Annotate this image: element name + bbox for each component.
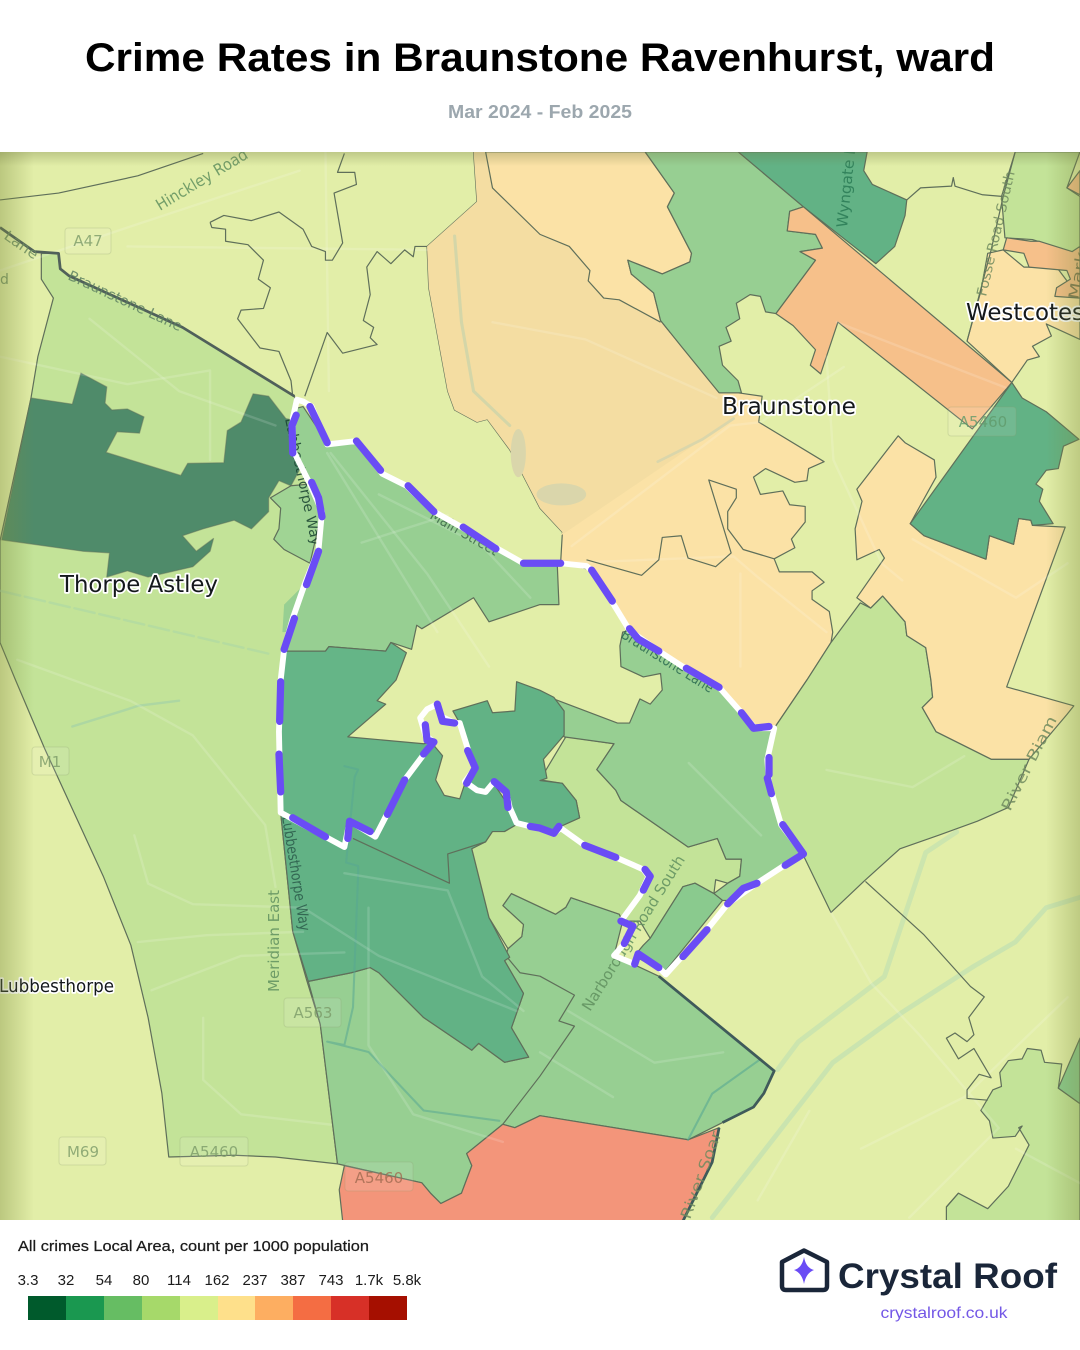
area: east green [910, 382, 1079, 559]
area: south-east light green [946, 1049, 1080, 1221]
legend scale labels [18, 1272, 422, 1289]
road labels: Lubbesthorpe Way [278, 815, 314, 932]
area: park lakes [511, 429, 586, 505]
legend scale labels: 162 [204, 1272, 230, 1289]
logo: Crystal Roof [782, 1250, 1057, 1322]
place labels: Braunstone [722, 394, 856, 420]
area: north-east orange corner [1067, 171, 1080, 195]
subtitle: date range: Mar 2024 - Feb 2025 [448, 102, 632, 122]
legend scale labels: 237 [242, 1272, 268, 1289]
area: Westcotes tan [967, 250, 1080, 382]
area: mid-green sliver [282, 589, 300, 632]
area: far right green [1058, 1038, 1080, 1104]
area: east tan [855, 436, 1074, 759]
area: east light green [769, 596, 1029, 912]
area: park darker tan [427, 152, 738, 536]
road shields: A5460 [355, 1169, 403, 1187]
area: orange band [776, 207, 1012, 429]
icon: house with star [782, 1250, 827, 1290]
logo wordmark: Crystal Roof [838, 1257, 1057, 1296]
road labels: Wyngate Drive [833, 113, 863, 228]
area: dark green Thorpe Astley [2, 373, 312, 577]
area: north ward mid green [286, 407, 559, 651]
place labels: Thorpe Astley [59, 572, 218, 598]
legend scale labels: 3.3 [18, 1272, 38, 1289]
road shields: M1 [39, 753, 61, 771]
road shields: A5460 [959, 413, 1007, 431]
area: west ward green [279, 642, 434, 847]
road labels: Narborough Road South [578, 852, 689, 1014]
area: Thorpe Astley light green zone [0, 253, 338, 1164]
road labels: Main Street [427, 506, 502, 560]
legend [18, 1238, 422, 1320]
legend scale labels: 54 [96, 1272, 112, 1289]
area: tan zone with park [427, 152, 833, 728]
road shields: A47 [73, 232, 103, 250]
title: Crime Rates in Braunstone Ravenhurst, ward [85, 36, 995, 80]
road labels: River Biam [998, 713, 1061, 814]
area: south mid green [308, 894, 774, 1203]
legend scale labels: 387 [280, 1272, 306, 1289]
road shields: M69 [67, 1143, 99, 1161]
area: east ward mid green [554, 630, 803, 900]
road labels: Meridian East [265, 890, 283, 992]
legend title: All crimes Local Area, count per 1000 population [18, 1238, 369, 1255]
website url: crystalroof.co.uk [880, 1305, 1009, 1322]
road labels: Braunstone Lane [618, 625, 717, 697]
street network overlay [0, 150, 1080, 1218]
legend scale labels: 5.8k [393, 1272, 422, 1289]
road labels: Lane [1, 228, 41, 263]
road shields [32, 228, 1016, 1191]
place labels [0, 300, 1080, 997]
area: red zone [339, 1116, 719, 1221]
road shields: A5460 [190, 1143, 238, 1161]
area: Wyngate green [738, 152, 907, 264]
boundary lines [0, 152, 1015, 1221]
legend scale labels: 114 [167, 1272, 191, 1289]
ward boundary: white line with purple dashes [279, 400, 803, 974]
area: Westcotes orange [1003, 238, 1080, 298]
road labels: d [0, 272, 9, 288]
road labels: Braunstone Lane [65, 268, 184, 335]
legend scale labels: 743 [318, 1272, 344, 1289]
area: south tongue [635, 883, 723, 973]
road labels: Hinckley Road [152, 145, 251, 214]
area: north-east light green [1001, 152, 1080, 253]
legend scale labels: 80 [133, 1272, 149, 1289]
area: south green [281, 745, 529, 1062]
legend colour bar [28, 1296, 407, 1320]
place labels: Lubbesthorpe [0, 976, 114, 997]
road labels: Lubbesthorpe Way [281, 417, 324, 547]
rivers and canals [0, 236, 1080, 1218]
area: east ward light green [472, 737, 741, 949]
area: central dark green [453, 682, 580, 833]
area: north mid green [628, 152, 822, 393]
road shields: A563 [294, 1004, 332, 1022]
legend scale labels: 32 [58, 1272, 74, 1289]
road labels: River Soar [677, 1128, 726, 1221]
area: small mid-green patch [270, 484, 322, 563]
road labels: Fosse Road South [974, 170, 1019, 298]
map edge vignette [0, 152, 1080, 1220]
legend scale labels: 1.7k [355, 1272, 384, 1289]
